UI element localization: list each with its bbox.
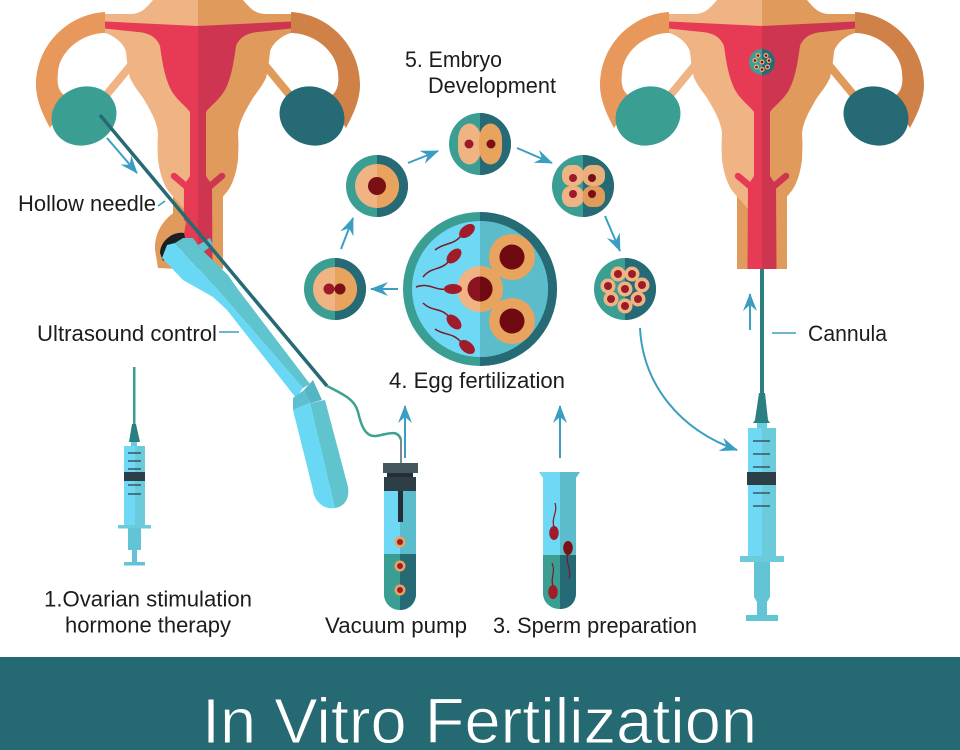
fertilization dish	[403, 212, 557, 366]
embryo stage: two pronuclei	[304, 258, 366, 320]
vacuum pump tube	[383, 440, 418, 610]
probe collar	[293, 380, 322, 410]
label: Ultrasound control: Ultrasound control	[37, 321, 217, 346]
label: Cannula: Cannula	[808, 321, 888, 346]
embryo stage: two cells	[449, 113, 511, 175]
probe shaft	[162, 238, 310, 398]
black speculum crescent	[160, 233, 186, 261]
arrow: pump to fertilization	[404, 406, 406, 458]
label: 1. Ovarian stimulation hormone therapy: 1.Ovarian stimulation	[44, 586, 252, 612]
probe grip	[293, 400, 348, 508]
label: 3. Sperm preparation: 3. Sperm preparation	[493, 613, 697, 638]
transfer syringe with cannula	[740, 269, 784, 621]
title banner	[0, 657, 960, 750]
uterus with egg retrieval	[36, 0, 401, 508]
label: 1. Ovarian stimulation hormone therapy	[44, 586, 252, 638]
label: Cannula	[772, 321, 888, 346]
sperm	[416, 221, 477, 357]
hollow needle	[100, 115, 327, 386]
label: 5. Embryo Development: 5. Embryo	[405, 47, 502, 72]
arrow: syringe up the cannula	[749, 294, 751, 330]
sperm preparation tube	[539, 472, 580, 609]
ultrasound probe	[162, 238, 348, 508]
curved arrow: morula to syringe	[640, 328, 737, 450]
aspiration tubing	[327, 386, 401, 440]
label: 4. Egg fertilization: 4. Egg fertilization	[389, 368, 565, 393]
implanted embryo	[749, 49, 775, 75]
label: 1. Ovarian stimulation hormone therapy: hormone therapy	[65, 612, 231, 638]
label: Vacuum pump: Vacuum pump	[325, 613, 467, 638]
embryo stage: four cells	[552, 155, 614, 217]
embryo stage: morula	[594, 258, 656, 320]
uterus with transferred embryo	[600, 0, 924, 269]
cervix fold	[155, 212, 186, 269]
embryo stage: single cell	[346, 155, 408, 217]
uterus right	[600, 0, 924, 269]
arrow: sperm to fertilization	[559, 406, 561, 458]
label: Hollow needle: Hollow needle	[18, 191, 156, 216]
development cycle arrows	[341, 148, 620, 289]
eggs	[457, 234, 535, 344]
label: 5. Embryo Development: Development	[428, 73, 556, 98]
small hormone syringe	[118, 367, 151, 566]
label: 5. Embryo Development	[405, 47, 556, 98]
arrow: follicle to needle	[107, 138, 137, 173]
uterus left	[36, 0, 360, 269]
